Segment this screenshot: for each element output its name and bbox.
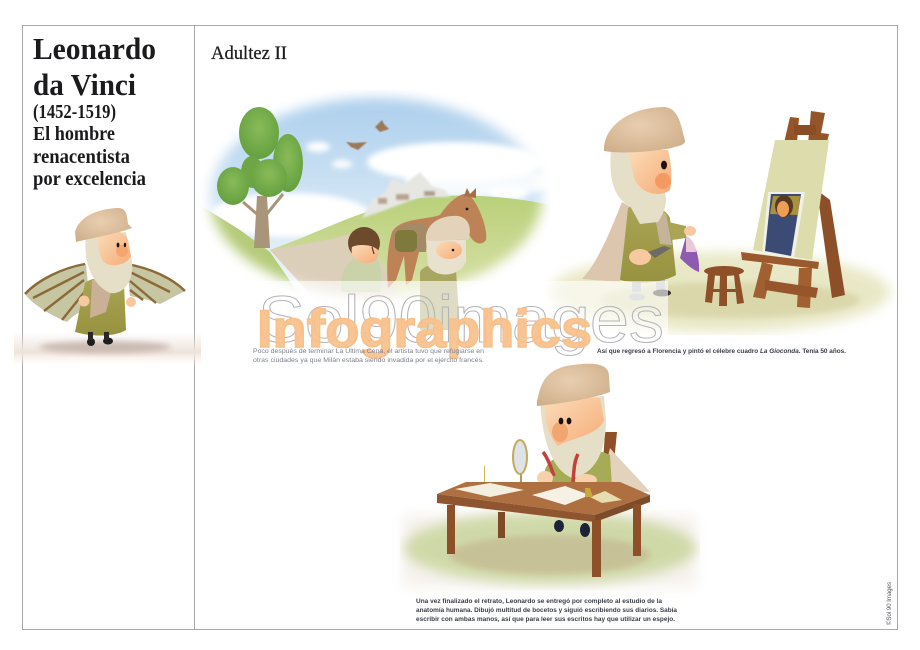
stool [704,266,744,306]
Leonardo painter [582,107,699,300]
horse [387,188,486,288]
Leonardo writing [537,364,612,488]
illustration: Leonardo with wings [14,208,201,366]
title block: renacentista [33,147,130,168]
title block: El hombre [33,124,115,145]
easel and canvas [741,111,845,308]
tree [217,107,303,248]
heading: Adultez II [211,43,287,64]
sidebar divider [194,25,196,630]
title block: Leonardo [33,31,156,66]
mirror [513,440,527,484]
caption: scene 3: escribir con ambas manos, así que para leer sus escritos hay que utilizar un espejo. [416,616,675,623]
scene 3: studying anatomy at the table [400,364,700,590]
chair and cape [603,432,617,462]
birds [346,120,389,150]
title block: por excelencia [33,169,146,190]
scene 2: painting the Mona Lisa [545,107,900,335]
caption: scene 1: Poco después de terminar La Última Cena, el artista tuvo que refugiarse en [253,346,484,355]
scene 1: journey with horse [200,90,555,330]
old Leonardo walking [420,216,470,330]
caption: scene 1: otras ciudades ya que Milán estaba siendo invadida por el ejército francés. [253,357,484,364]
title block: da Vinci [33,67,136,102]
watermark overlay: Sol90images [258,282,664,356]
candle [480,466,488,485]
title block [33,31,156,190]
watermark overlay: Infographics [257,300,592,359]
landscape background [200,90,555,310]
distant village [362,172,450,218]
ground [545,240,900,335]
title block: (1452-1519) [33,102,116,123]
caption: scene 3: anatomía humana. Dibujó multitud de bocetos y siguió escribiendo sus diarios. Sabía [416,607,677,614]
boy [341,227,381,292]
credit: ©Sol 90 Images [886,582,893,625]
caption: scene 2: Así que regresó a Florencia y pintó el célebre cuadro La Gioconda. Tenía 50 años. [597,348,846,355]
pale ground halo [403,515,696,587]
caption: scene 3: Una vez finalizado el retrato, Leonardo se entregó por completo al estudio de la [416,598,662,605]
table [437,482,650,577]
grass ground [400,505,700,590]
